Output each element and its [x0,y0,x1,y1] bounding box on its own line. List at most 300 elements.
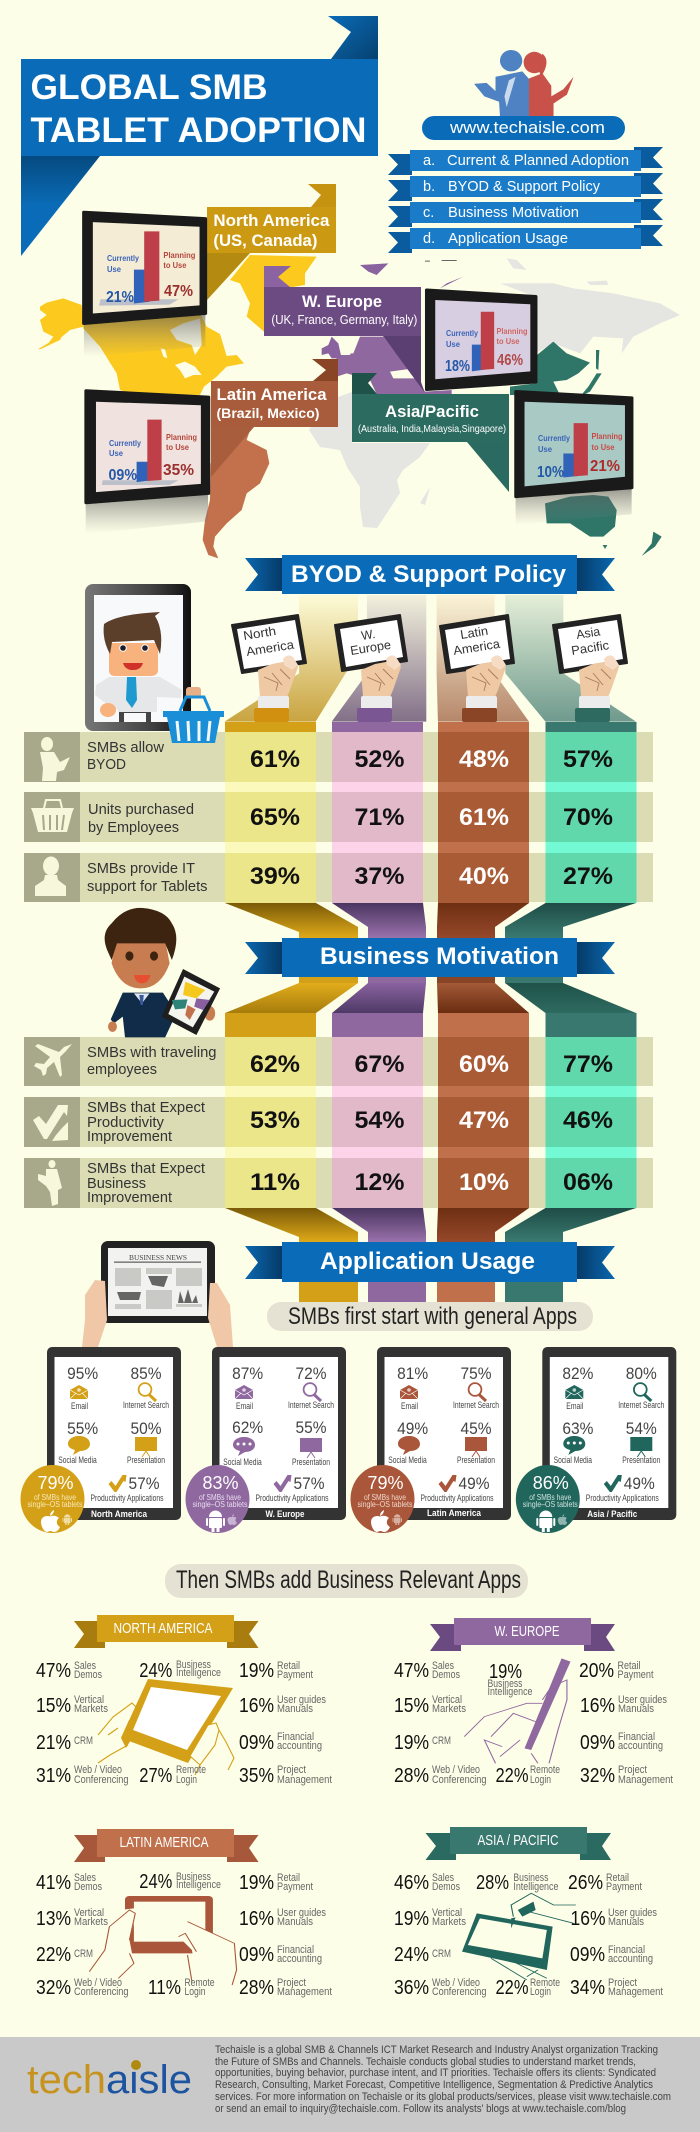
badge: OS share: single–OS tablets [192,1500,248,1509]
title banner [21,16,378,256]
stat: Web / Video Conferencing: Web / Video [432,1764,480,1776]
ribbon d: d. [423,231,435,247]
stat: Remote Login: Login [530,1986,551,1998]
stat: Financial accounting: accounting [277,1953,322,1965]
stat: Business Intelligence: Intelligence [176,1879,221,1891]
region: W. Europe label: (UK, France, Germany, Italy) [271,313,417,327]
icon: airplane [24,1037,80,1086]
about text: Techaisle is a global SMB & Channels ICT Market Research and Industry Analyst organization Tracking [215,2044,658,2056]
row: SMBs that Expect Business Improvement: 06% [563,1169,613,1196]
stat: User guides Manuals: User guides [608,1907,657,1919]
app tablet: North America [20,1347,181,1533]
stat: Retail Payment [239,1660,313,1682]
stat: Vertical Markets: Markets [74,1916,108,1928]
stat: Sales Demos: Demos [432,1881,460,1893]
stat: Retail Payment: Payment [277,1881,313,1893]
ribbon d: Application Usage [448,231,568,247]
tablet: Latin America adoption chart: 35% [163,462,194,479]
stat: Project Management: Management [608,1986,663,1998]
badge: OS share: of SMBs have [364,1493,406,1502]
stat: CRM: 24% [394,1944,429,1966]
hand sign: W. Europe: W. [360,627,376,643]
stat: Business Intelligence: Business [176,1871,211,1883]
stat: Vertical Markets: Markets [432,1916,466,1928]
tablet: Asia/Pacific adoption chart [516,391,632,525]
tablet: Asia/Pacific adoption chart: Currently [538,433,570,443]
stat: CRM: 19% [394,1732,429,1754]
app tablet: W. Europe: Email [236,1401,253,1412]
stat: Project Management: 34% [570,1977,605,1999]
stat: User guides Manuals: 16% [570,1908,606,1930]
folds down to Business Motivation ribbon [225,903,636,938]
row: SMBs allow BYOD: 48% [459,746,509,773]
illustration: man with map tablet [105,908,220,1037]
illustration: hands with purple phone [464,1658,570,1763]
row: Units purchased by Employees: 61% [459,804,509,831]
tablet: Latin America adoption chart [86,391,208,534]
row: SMBs with traveling employees: 62% [250,1051,300,1078]
stat: Financial accounting: accounting [277,1740,322,1752]
stat: Retail Payment: Payment [618,1669,654,1681]
stat: Financial accounting [580,1731,663,1754]
stat: Financial accounting: accounting [608,1953,653,1965]
tablet: W. Europe adoption chart [427,290,536,390]
app tablet: Latin America: Email [401,1401,418,1412]
stat: Remote Login: 22% [496,1977,529,1999]
row: SMBs provide IT support for Tablets: support for Tablets [87,879,208,895]
stat: Remote Login: 11% [148,1977,181,1999]
tablet: W. Europe adoption chart: 18% [445,358,470,375]
ribbon a [388,147,663,175]
tablet: Latin America adoption chart: Use [109,448,123,458]
banner top fold [328,16,378,59]
row: SMBs that Expect Business Improvement: 12% [354,1169,404,1196]
stat: Remote Login [139,1764,206,1787]
pill heading: Then SMBs add Business Relevant Apps [165,1564,528,1598]
stat: Financial accounting: 09% [580,1732,615,1754]
tablet: W. Europe adoption chart: 46% [497,352,523,369]
badge: OS share: single–OS tablets [358,1500,412,1509]
stat: CRM: 22% [36,1944,71,1966]
badge: OS share: single–OS tablets [28,1500,82,1509]
ribbon: North America: NORTH AMERICA [114,1620,212,1637]
stat: Financial accounting: accounting [618,1740,663,1752]
badge: OS share: 86% [533,1473,569,1493]
app tablet: Latin America: Internet Search [453,1400,499,1411]
stat: Financial accounting: 09% [239,1732,274,1754]
hand sign: North America: America [245,638,295,659]
stat: Sales Demos: 47% [36,1660,71,1682]
stat: Remote Login: Remote [530,1977,560,1989]
stat: Web / Video Conferencing: Conferencing [432,1986,486,1998]
row: SMBs that Expect Productivity Improvement: 47% [459,1107,509,1134]
badge: OS share: 79% [38,1473,74,1493]
row: SMBs that Expect Productivity Improvement: 46% [563,1107,613,1134]
stat: User guides Manuals: User guides [618,1694,667,1706]
app tablet: Asia Pacific [516,1347,676,1533]
stat: Project Management [580,1764,673,1787]
illustration: man in tablet with basket [85,584,224,743]
tablet: North America adoption chart: Currently [107,253,139,263]
column: Latin America [438,1013,529,1208]
tablet: North America adoption chart [84,212,205,357]
row: Units purchased by Employees: by Employees [88,820,179,836]
stat: Sales Demos [36,1872,102,1894]
ribbon c: Business Motivation [448,205,579,221]
stat: Vertical Markets: Vertical [74,1694,104,1706]
row strip 2 [24,1097,653,1147]
row: Units purchased by Employees: 65% [250,804,300,831]
stat: Retail Payment: Payment [277,1669,313,1681]
stat: Web / Video Conferencing: Web / Video [74,1764,122,1776]
row strip 3 [24,853,653,902]
icon: woman silhouette [24,732,80,782]
stat: Sales Demos: 41% [36,1872,71,1894]
row: SMBs provide IT support for Tablets: 27% [563,863,613,890]
stat: Remote Login: Login [184,1986,206,1998]
stat: Project Management: Management [277,1774,332,1786]
stat: User guides Manuals [239,1907,326,1930]
stat: CRM: 21% [36,1732,71,1754]
row: SMBs allow BYOD: 57% [563,746,613,773]
stat: Sales Demos: 46% [394,1872,429,1894]
icon: person bust [24,853,80,902]
row: SMBs provide IT support for Tablets [24,853,613,902]
map: Africa in grey [309,392,430,528]
stat: Web / Video Conferencing: Web / Video [74,1977,122,1989]
stat: Web / Video Conferencing [36,1764,128,1787]
illustration: news tablet held in hands [82,1241,233,1347]
stat: Sales Demos: Demos [432,1669,460,1681]
stat: Business Intelligence: 28% [476,1872,509,1894]
tablet: Latin America adoption chart: 09% [108,467,137,484]
about text: or send an email to inquiry@techaisle.com. Follow its analysts' blogs at www.techaisle.com/blog [215,2103,626,2115]
illustration: hands with teal tablet [462,1893,576,1980]
badge: OS share: 83% [202,1473,238,1493]
hand sign: W. Europe [335,615,407,722]
tablet: North America adoption chart: to Use [163,260,187,270]
tablet: Latin America adoption chart: Currently [109,438,141,448]
stat: Retail Payment: Retail [277,1660,300,1672]
app tablet: W. Europe: Presentation [292,1457,330,1468]
app tablet: Latin America: 49% [397,1419,428,1438]
tablet: North America adoption chart: Planning [163,250,195,260]
row: SMBs that Expect Productivity Improvement: 53% [250,1107,300,1134]
badge: OS share [20,1465,84,1533]
map: South America in brown [203,430,269,558]
stat: Web / Video Conferencing: Conferencing [74,1986,128,1998]
region: Latin America label: (Brazil, Mexico) [216,405,320,421]
stat: Remote Login: Login [176,1774,197,1786]
about text: the Future of SMBs and Channels. Techaisle conducts global studies to understand market trends, [215,2056,636,2068]
region: W. Europe label: W. Europe [302,292,382,311]
stat: Project Management [570,1977,663,1999]
banner bottom fold [21,156,100,256]
hand sign: Latin America: Latin [459,624,489,642]
row: SMBs provide IT support for Tablets: 37% [354,863,404,890]
column: Asia Pacific [546,722,636,903]
stat: Business Intelligence: 24% [139,1660,172,1682]
tablet: W. Europe adoption chart: Use [446,339,460,349]
hand sign: Asia Pacific: Asia [575,624,601,642]
stat: Web / Video Conferencing: Conferencing [432,1774,486,1786]
stat: Retail Payment: 19% [239,1660,274,1682]
badge: OS share: single–OS tablets [523,1500,578,1509]
hand sign: Latin America: America [452,637,501,658]
stat: User guides Manuals: Manuals [277,1703,313,1715]
stat: Web / Video Conferencing [394,1977,486,1999]
stat: Vertical Markets: Markets [74,1703,108,1715]
stat: Sales Demos: Demos [74,1669,102,1681]
column: North America [225,1013,316,1208]
tablet: Asia/Pacific adoption chart: 10% [537,464,564,481]
app tablet: North America: 95% [67,1364,98,1383]
app tablet: North America: Presentation [127,1455,165,1466]
row: SMBs that Expect Productivity Improvement: Productivity [87,1115,165,1131]
app tablet: Asia Pacific: Email [566,1401,583,1412]
stat: Project Management [239,1764,332,1787]
row: SMBs with traveling employees: SMBs with traveling [87,1045,216,1061]
ribbon: W. Europe [430,1618,615,1651]
stat: Web / Video Conferencing: 28% [394,1765,429,1787]
ribbon: W. Europe: W. EUROPE [494,1623,560,1640]
ribbon heading: BYOD & Support Policy [245,555,615,594]
stat: User guides Manuals [239,1694,326,1717]
stat: Sales Demos: Sales [432,1660,454,1672]
stat: Business Intelligence: Intelligence [176,1667,221,1679]
stat: Remote Login: 22% [496,1765,529,1787]
panel: North America business apps [36,1615,332,1787]
stat: Sales Demos: Demos [74,1881,102,1893]
stat: User guides Manuals: 16% [239,1908,274,1930]
app tablet: North America: 50% [130,1419,162,1438]
stat: Financial accounting: Financial [277,1944,314,1956]
about text: Research, Consulting, Market Forecast, Competitive Intelligence, Segmentation & Predictive Analytics [215,2079,653,2091]
tablet: Latin America adoption chart: Planning [166,432,197,442]
tablet: W. Europe adoption chart: Planning [496,326,528,336]
hand sign: North America: North [242,624,277,643]
stat: Web / Video Conferencing [394,1764,486,1787]
stat: Financial accounting [239,1944,322,1966]
stat: Web / Video Conferencing: 36% [394,1977,429,1999]
icon: businessman silhouette [24,1158,80,1208]
row: SMBs allow BYOD [24,732,613,782]
stat: Project Management: Management [618,1774,673,1786]
stat: Sales Demos: 47% [394,1660,429,1682]
stat: User guides Manuals: Manuals [618,1703,654,1715]
stat: Remote Login: Remote [530,1764,560,1776]
stat: Sales Demos [394,1660,460,1682]
app tablet: Latin America: Presentation [457,1455,495,1466]
stat: User guides Manuals: User guides [277,1907,326,1919]
row: SMBs provide IT support for Tablets: 39% [250,863,300,890]
app tablet: North America: Email [71,1401,88,1412]
stat: Vertical Markets [394,1907,466,1930]
app tablet: Latin America: 45% [460,1419,492,1438]
stat: Remote Login: 27% [139,1765,172,1787]
ribbon: Asia Pacific [426,1827,611,1860]
badge: OS share [350,1465,414,1533]
app tablet: Asia Pacific: Productivity Applications [586,1493,659,1504]
stat: Retail Payment: Retail [606,1872,629,1884]
hand sign: W. Europe: Europe [349,638,392,658]
stat: User guides Manuals: Manuals [608,1916,644,1928]
ribbon c: c. [423,205,434,221]
row: SMBs provide IT support for Tablets: 40% [459,863,509,890]
stat: Remote Login: Remote [176,1764,206,1776]
hand sign: North America [232,615,306,722]
stat: Vertical Markets [36,1907,108,1930]
stat: Web / Video Conferencing: Conferencing [74,1774,128,1786]
row: Units purchased by Employees: Units purchased [88,802,194,818]
app tablet: W. Europe [186,1347,346,1533]
badge: OS share: of SMBs have [529,1493,572,1502]
stat: Remote Login [496,1764,560,1787]
badge: OS share: of SMBs have [34,1493,76,1502]
stat: Vertical Markets: Vertical [74,1907,104,1919]
region: North America label: (US, Canada) [213,231,317,250]
stat: User guides Manuals: 16% [239,1695,274,1717]
ribbon heading: Business Motivation [245,938,615,977]
stat: Vertical Markets: 15% [394,1695,429,1717]
badge: OS share: of SMBs have [199,1493,241,1502]
stat: Project Management: Project [277,1977,306,1989]
pill heading: Then SMBs add Business Relevant Apps: Then SMBs add Business Relevant Apps [176,1566,521,1594]
contents list [388,147,663,253]
ribbon: Asia Pacific: ASIA / PACIFIC [478,1832,559,1849]
icon: check mark and arrow [24,1097,80,1147]
row: SMBs that Expect Productivity Improvement: 54% [354,1107,404,1134]
stat: Remote Login [496,1977,560,1999]
region: North America label: North America [213,211,330,230]
app tablet: Asia Pacific: 63% [562,1419,593,1438]
row: SMBs allow BYOD: SMBs allow [87,740,165,756]
title [30,68,366,150]
stat: Retail Payment: 19% [239,1872,274,1894]
illustration: hands with brown tablet [89,1896,237,1985]
tablet: North America adoption chart: 21% [106,289,134,306]
app tablet: Latin America: 49% [458,1474,490,1493]
app tablet: W. Europe: Productivity Applications [256,1493,329,1504]
column lead-ins from BYOD ribbon [225,595,636,722]
app tablet: W. Europe: 87% [232,1364,263,1383]
stat: Remote Login: Remote [184,1977,214,1989]
row strip 1 [24,732,653,782]
BYOD panel columns [24,595,653,938]
app tablet: Asia Pacific: 80% [626,1364,657,1383]
stat: Vertical Markets: Markets [432,1703,466,1715]
ribbon: Latin America: LATIN AMERICA [120,1834,208,1851]
row: SMBs with traveling employees: 60% [459,1051,509,1078]
map: Europe in purple [322,263,463,394]
stat: Business Intelligence: 19% [489,1661,522,1683]
website pill: www.techaisle.com [449,118,605,137]
row: SMBs that Expect Business Improvement: Business [87,1176,146,1192]
stat: Business Intelligence: Intelligence [488,1686,532,1698]
stat: Business Intelligence [139,1659,221,1682]
app tablet: Asia Pacific: 54% [626,1419,657,1438]
column: Asia Pacific [546,1013,636,1208]
app tablet: Asia Pacific: Presentation [622,1455,660,1466]
row: SMBs allow BYOD: 52% [354,746,404,773]
app tablet: Latin America [350,1347,511,1533]
stat: Financial accounting: 09% [570,1944,605,1966]
row: SMBs that Expect Business Improvement [24,1158,613,1208]
icon: business people with tablets [474,50,574,116]
region: Asia/Pacific label: Asia/Pacific [385,402,479,421]
stat: CRM: CRM [432,1735,451,1747]
stat: Retail Payment: 20% [579,1660,614,1682]
stat: Business Intelligence [488,1661,532,1698]
row: SMBs with traveling employees: 77% [563,1051,613,1078]
app tablet: Asia Pacific: Asia / Pacific [587,1509,637,1520]
app tablet: North America: 55% [67,1419,98,1438]
app tablet: Latin America: Latin America [427,1508,482,1519]
stat: Retail Payment: 26% [568,1872,603,1894]
stat: Project Management: Management [277,1986,332,1998]
row: SMBs provide IT support for Tablets: SMBs provide IT [87,861,195,877]
stat: Project Management: 32% [580,1765,615,1787]
illustration: hands with gold tablet [98,1679,234,1775]
stat: CRM: CRM [74,1948,93,1960]
row: SMBs that Expect Business Improvement: SMBs that Expect [87,1161,205,1177]
row strip 2 [24,792,653,842]
ribbon heading: Application Usage [245,1242,615,1282]
ribbon heading: BYOD & Support Policy: BYOD & Support Policy [291,561,567,588]
row: Units purchased by Employees: 70% [563,804,613,831]
ribbon: Latin America [74,1829,258,1862]
hand sign: Asia Pacific: Pacific [570,638,610,658]
stat: Remote Login: Login [530,1774,551,1786]
app tablet: Asia Pacific: 49% [624,1474,655,1493]
region: Asia/Pacific label: (Australia, India,Malaysia,Singapore) [358,423,506,435]
folds from ribbon to columns [225,977,636,1013]
Business Motivation panel columns [24,977,653,1302]
stat: Web / Video Conferencing: Web / Video [432,1977,480,1989]
stat: User guides Manuals: Manuals [277,1916,313,1928]
row: SMBs that Expect Productivity Improvement [24,1097,613,1147]
app tablet: W. Europe: Internet Search [288,1400,334,1411]
stat: Vertical Markets: 13% [36,1908,71,1930]
stat: Financial accounting [570,1944,653,1966]
row: SMBs allow BYOD: BYOD [87,757,126,773]
region: W. Europe label [264,266,425,393]
app tablet: North America: 85% [130,1364,162,1383]
stat: Sales Demos: Sales [74,1660,96,1672]
website pill [422,116,625,140]
stat: Project Management: 35% [239,1765,274,1787]
row: SMBs that Expect Business Improvement: 11% [250,1169,300,1196]
app tablet: W. Europe: 57% [294,1474,324,1493]
stat: Project Management: 28% [239,1977,274,1999]
map: Asia-Pacific in teal [510,342,662,556]
app tablet: Asia Pacific: Social Media [554,1455,593,1466]
stat: Business Intelligence: Business [176,1659,211,1671]
column: Latin America [438,722,529,903]
ribbon b: BYOD & Support Policy [448,179,601,195]
stat: Business Intelligence [476,1872,558,1894]
stat: Retail Payment [579,1660,654,1682]
row: SMBs with traveling employees: employees [87,1062,157,1078]
app tablet: North America: 57% [128,1474,160,1493]
row: SMBs that Expect Productivity Improvement: Improvement [87,1129,172,1145]
hand sign: Asia Pacific [553,615,627,722]
app tablet: North America: Internet Search [123,1400,169,1411]
tablet: Asia/Pacific adoption chart: 21% [590,458,620,475]
world map [38,255,680,558]
stat: Business Intelligence: Business [513,1872,549,1884]
app tablet: W. Europe: Social Media [223,1457,262,1468]
